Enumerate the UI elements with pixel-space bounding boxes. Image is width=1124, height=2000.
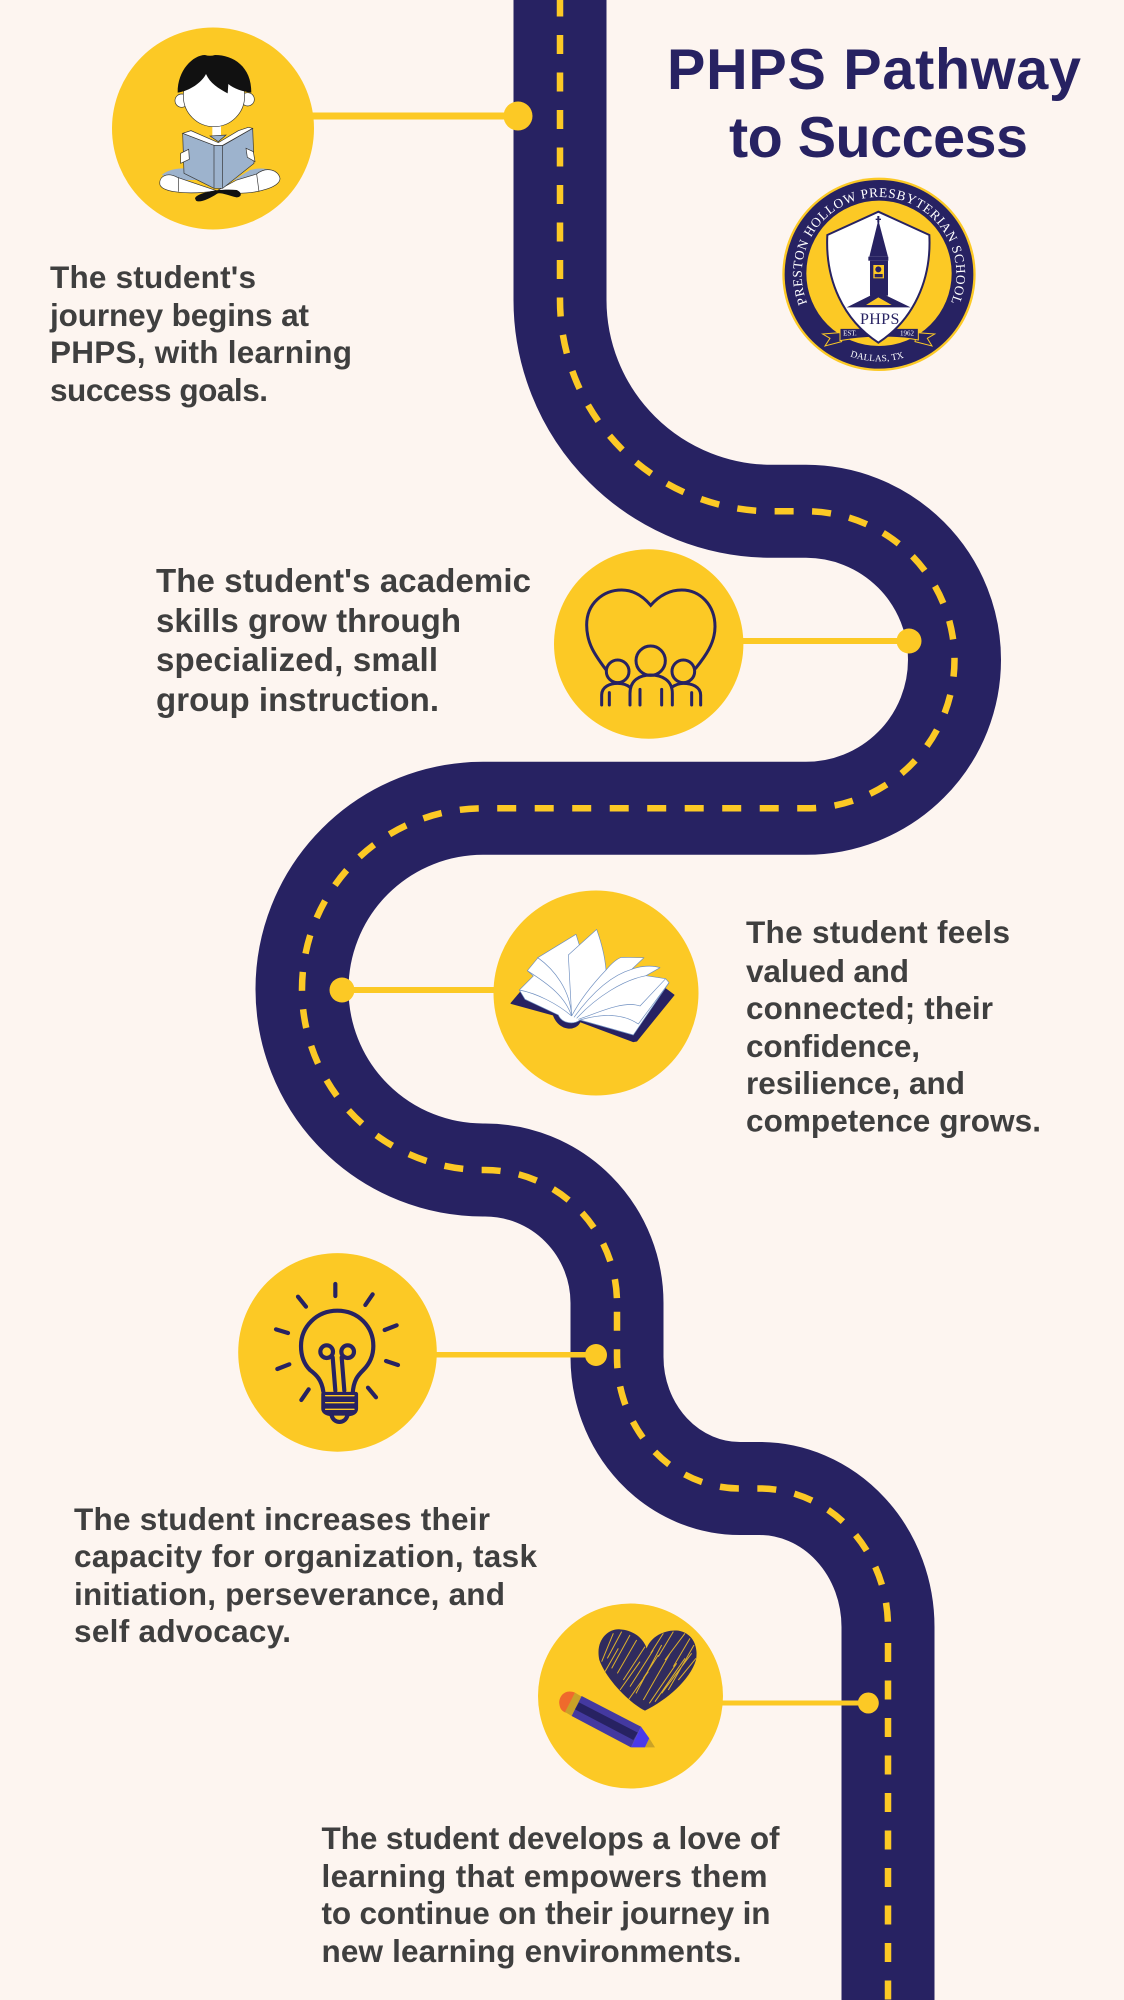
school seal logo: EST. [843,329,857,337]
step 5: text [322,1820,780,1969]
step 5: connector [720,1692,879,1714]
winding road with dashed centre line [302,0,954,2000]
step 2: text [156,562,531,718]
step 2: connector [740,628,922,654]
school seal logo [782,178,976,371]
step 3: connector [330,978,497,1002]
step 5: text: The student develops a love of [322,1820,780,1856]
title: PHPS Pathway [667,38,1081,102]
step 3: text: connected; their [746,990,993,1026]
step 2: yellow circle with family heart icon [554,549,743,739]
step 1: text: success goals. [50,372,268,408]
step 3: text: confidence, [746,1028,920,1064]
icon: scribbled heart [598,1629,697,1711]
step 3: text: valued and [746,953,909,989]
step 2: text: The student's academic [156,562,531,599]
step 4: text: initiation, perseverance, and [74,1576,505,1612]
step 3: text: resilience, and [746,1065,965,1101]
title [667,38,1081,170]
step 4: connector [434,1344,607,1366]
step 4: text: capacity for organization, task [74,1538,537,1574]
step 1: yellow circle with reading student icon [112,28,314,230]
step 3: text: The student feels [746,914,1010,950]
step 2: text: skills grow through [156,602,461,639]
icon: open book [511,929,674,1042]
school seal logo: PRESTON HOLLOW PRESBYTERIAN SCHOOL [792,188,966,306]
step 3: text: competence grows. [746,1102,1041,1138]
step 4: text: The student increases their [74,1501,490,1537]
step 5: text: new learning environments. [322,1933,742,1969]
icon: light bulb [276,1284,398,1422]
step 1: text: journey begins at [49,297,310,333]
step 5: text: learning that empowers them [322,1858,768,1894]
step 1: text: The student's [50,259,256,295]
step 4: yellow circle with light bulb icon [238,1253,437,1452]
step 4: text [74,1501,537,1649]
step 3: text [746,914,1041,1138]
school seal logo: DALLAS, TX [850,350,904,362]
step 4: text: self advocacy. [74,1613,291,1649]
school seal logo: PHPS [860,311,899,328]
school seal logo: 1962 [900,329,914,337]
step 5: yellow circle with scribbled heart and pencil icon [538,1604,723,1788]
step 2: text: specialized, small [156,641,438,678]
step 5: text: to continue on their journey in [322,1895,770,1931]
icon: family under heart [587,590,715,705]
step 3: yellow circle with open book icon [494,890,698,1096]
icon: student reading a book [160,55,280,201]
step 1: connector [310,102,532,130]
title: to Success [729,106,1028,170]
step 1: text [49,259,352,408]
icon: pencil [559,1691,655,1747]
step 2: text: group instruction. [156,681,439,718]
step 1: text: PHPS, with learning [50,334,352,370]
